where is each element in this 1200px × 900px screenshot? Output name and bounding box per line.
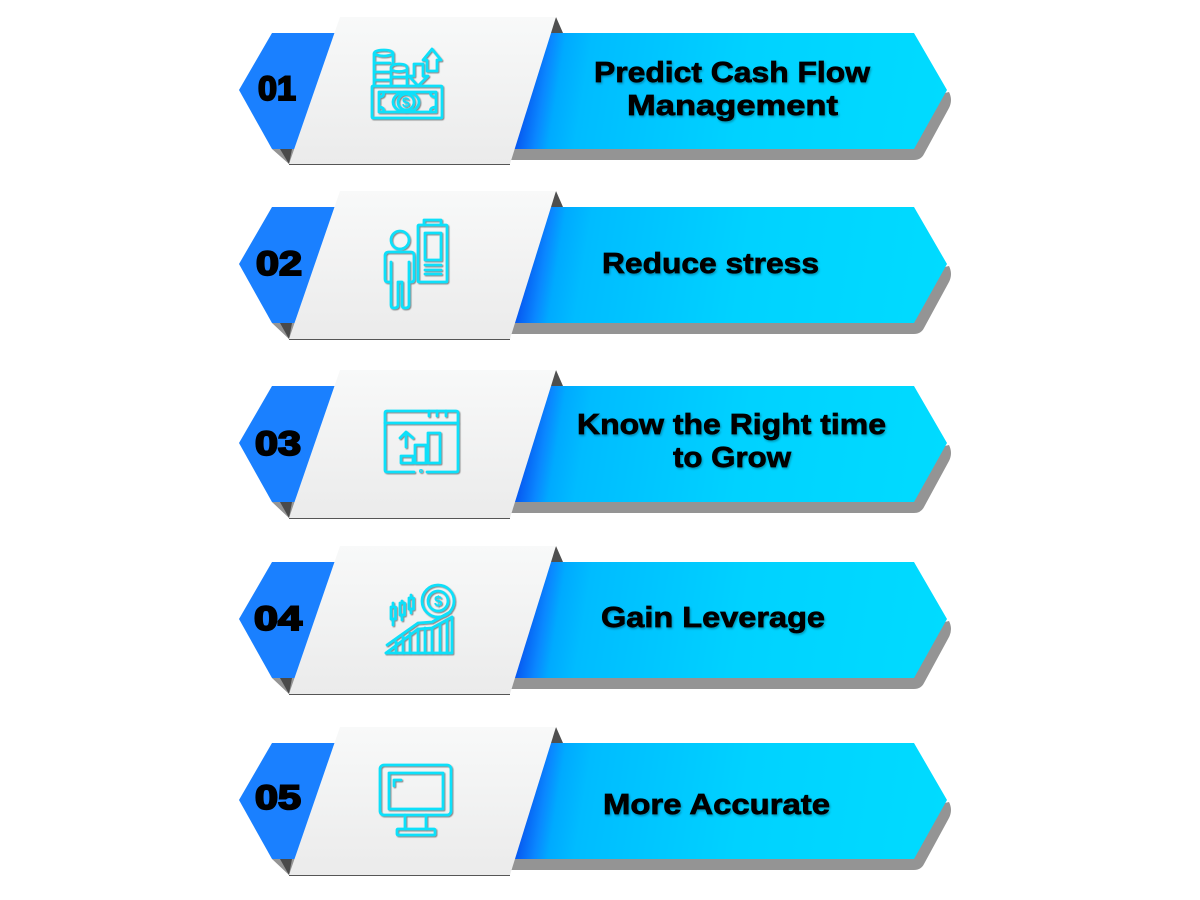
number: 03 [255, 425, 301, 463]
icon: money and coins: $ [402, 94, 410, 110]
title bar [505, 207, 947, 323]
number tab [239, 562, 345, 678]
bar shadow [272, 621, 951, 694]
top dark fold [549, 191, 563, 207]
card bottom edge [289, 164, 510, 166]
icon: person and battery [385, 220, 447, 308]
icon: growth chart window [385, 411, 458, 472]
title bar [505, 562, 947, 678]
number: 02 [256, 245, 302, 283]
heading: More Accurate [603, 789, 830, 821]
number: 04 [254, 600, 302, 638]
card bottom edge [289, 338, 510, 340]
top dark fold [549, 727, 563, 743]
number tab [239, 207, 345, 323]
row 4: gain leverage [239, 546, 951, 694]
bar shadow [272, 445, 951, 518]
bar shadow [272, 92, 951, 164]
heading: Predict Cash Flow [594, 57, 870, 89]
icon: rising chart and coin [386, 585, 454, 653]
card bottom edge [289, 518, 510, 520]
heading line 2: to Grow [673, 442, 791, 474]
row 2: reduce stress [239, 191, 951, 340]
top dark fold [549, 546, 563, 562]
icon: rising chart and coin: $ [434, 593, 443, 610]
title bar [505, 386, 947, 502]
left dark fold [280, 678, 292, 694]
row 5: more accurate [239, 727, 951, 876]
number: 01 [258, 70, 296, 108]
row 3: know the right time to grow [239, 370, 951, 518]
title bar [505, 743, 947, 859]
icon: money and coins [372, 49, 442, 118]
white card [289, 17, 556, 164]
row 1: predict cash flow management [239, 17, 951, 164]
card bottom edge [289, 874, 510, 876]
number tab [239, 743, 345, 859]
white card [289, 546, 556, 694]
number tab [239, 33, 345, 149]
heading: Know the Right time [577, 409, 886, 441]
top dark fold [549, 17, 563, 33]
card bottom edge [289, 694, 510, 696]
white card [289, 191, 556, 339]
heading: Reduce stress [602, 248, 819, 280]
heading line 2: Management [627, 90, 838, 122]
bar shadow [272, 802, 951, 875]
number: 05 [255, 779, 301, 817]
left dark fold [280, 149, 292, 164]
number tab [239, 386, 345, 502]
title bar [505, 33, 947, 149]
icon: monitor [380, 765, 451, 835]
bar shadow [272, 266, 951, 339]
white card [289, 370, 556, 518]
left dark fold [280, 859, 292, 875]
top dark fold [549, 370, 563, 386]
left dark fold [280, 323, 292, 339]
white card [289, 727, 556, 875]
heading: Gain Leverage [601, 602, 825, 634]
left dark fold [280, 502, 292, 518]
